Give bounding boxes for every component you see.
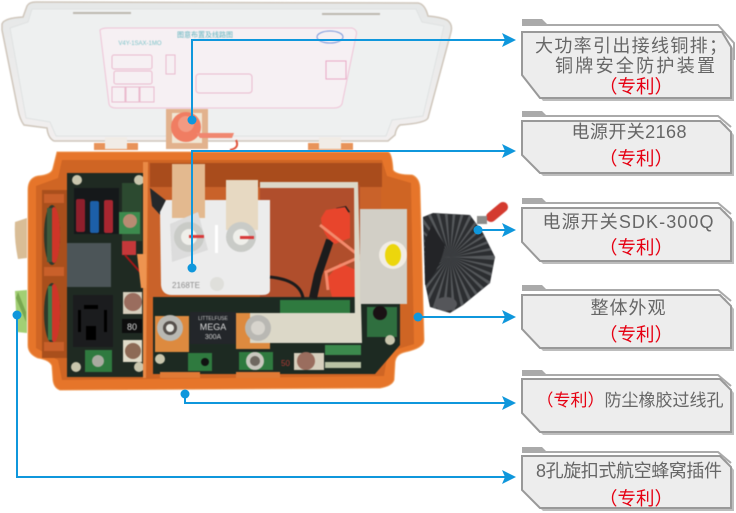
bottom power board [153,297,400,378]
callout box: high-power copper bar [522,19,734,101]
callout box: 8-pin aviation plug [522,447,734,511]
callout box: 8-pin aviation plug: （专利） [599,488,673,509]
callout box: power switch 2168: （专利） [599,148,673,169]
left seal pocket [42,190,67,358]
leader arrow: aviation plug [12,310,516,484]
metal box with sticker [360,209,407,304]
photo: connectors on left side [15,218,27,333]
orange divider [143,162,148,378]
fuse: MEGA 300A: 300A [205,334,221,341]
callout box: high-power copper bar: （专利） [599,76,673,97]
fuse: MEGA 300A: MEGA [200,322,226,332]
callout box: high-power copper bar: 大功率引出接线铜排； [535,36,727,56]
callout box: overall appearance [522,285,734,351]
metal bracket [260,182,362,343]
callout box: power switch SDK-300Q [522,198,734,264]
callout box: power switch 2168: 电源开关2168 [572,122,686,142]
photo: transparent lid [2,2,452,150]
callout box: power switch 2168 [522,111,734,176]
fuses [74,188,119,234]
callout box: overall appearance: （专利） [599,324,673,345]
photo: black rubber joystick boot [420,207,503,313]
callout box: power switch SDK-300Q: （专利） [599,237,673,258]
rubber grommet on lid [166,109,237,150]
main switch: 2168TE [172,281,200,290]
relay grey [67,243,111,287]
leader arrow: switch 2168 [188,144,516,272]
callout box: 8-pin aviation plug: 8孔旋扣式航空蜂窝插件 [536,461,722,481]
bottom power board: 50 [281,359,290,368]
callout box: high-power copper bar: 铜牌安全防护装置 [555,56,715,76]
callout box: power switch SDK-300Q: 电源开关SDK-300Q [542,212,714,232]
left control board: 80 [127,322,137,332]
right compartment interior [149,163,381,298]
main switch [160,164,270,295]
cable and rubber seals [270,206,362,298]
lid hinges [94,137,353,150]
callout box: dustproof rubber grommet: （专利）防尘橡胶过线孔 [536,391,724,410]
leader arrow: overall appearance [414,310,516,324]
photo: orange enclosure [28,152,424,390]
leader arrow: copper bar [188,33,516,124]
relay black [73,295,113,347]
callout box: dustproof rubber grommet [522,370,734,435]
left control board [67,173,144,377]
callout box: overall appearance: 整体外观 [590,298,666,318]
leader arrow: switch SDK-300Q [474,223,516,237]
fuse: MEGA 300A [190,312,236,344]
fuse: MEGA 300A: LITTELFUSE [198,316,229,322]
leader arrow: rubber grommet [180,390,516,410]
photo: transparent lid: V4Y-1SAX-1MO [118,41,162,47]
photo: transparent lid: 图意布置及线路图 [177,30,233,39]
